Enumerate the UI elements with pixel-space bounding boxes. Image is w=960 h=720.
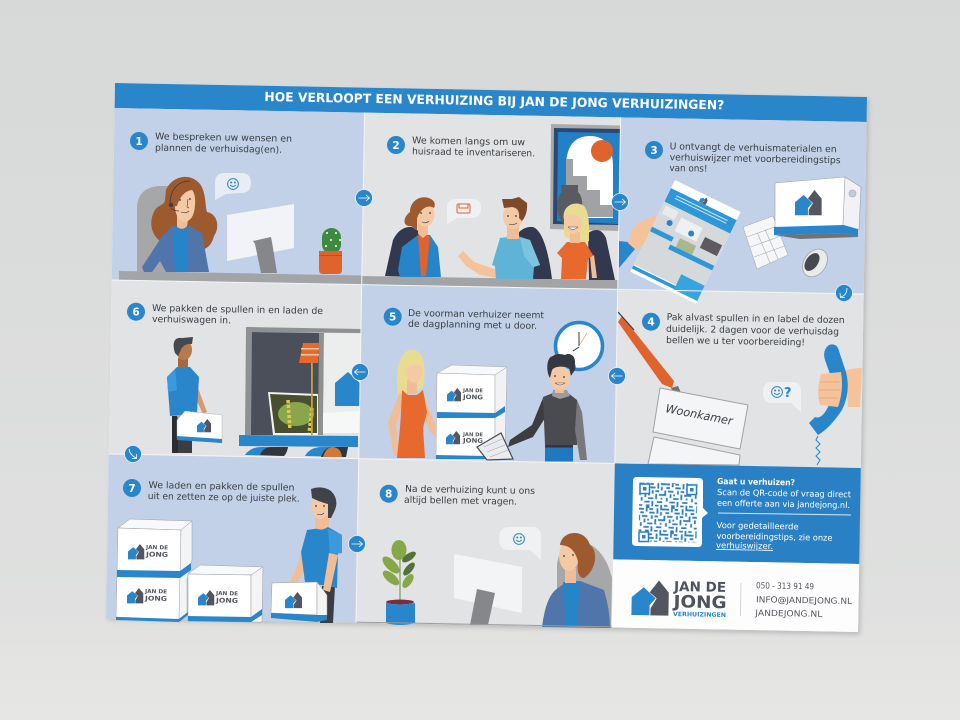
- stacked boxes: [116, 519, 192, 622]
- two stacked boxes with logo: [436, 365, 507, 459]
- monitor: [454, 554, 522, 625]
- text step 4: [666, 312, 845, 348]
- illustration: call-centre woman: [542, 533, 612, 628]
- text step 8: altijd bellen met vragen.: [404, 495, 517, 508]
- call to action text: voorbereidingstips, zie onze: [716, 531, 833, 543]
- clock: [556, 322, 602, 370]
- poster: [106, 83, 867, 632]
- two stacked boxes with logo: JAN DE: [462, 432, 484, 438]
- text step 8: [404, 484, 535, 508]
- contact details: 050 - 313 91 49: [756, 581, 814, 592]
- text step 2: We komen langs om uw: [412, 135, 526, 148]
- arrow 2 to 3: [612, 194, 628, 210]
- contact panel: logo and details: [612, 559, 859, 632]
- step number 2: [387, 136, 405, 154]
- call to action text: verhuiswijzer.: [716, 540, 773, 551]
- two stacked boxes with logo: JONG: [462, 394, 483, 401]
- tape roll: [797, 244, 833, 282]
- text step 4: bellen we u ter voorbereiding!: [666, 335, 805, 348]
- call to action text: een offerte aan via jandejong.nl.: [717, 498, 850, 510]
- step number 6: 6: [132, 307, 140, 319]
- arrow 3 to 4: [836, 284, 852, 302]
- poster shadow: [108, 86, 869, 635]
- text step 3: verhuiswijzer met voorbereidingstips: [670, 152, 841, 166]
- step number 7: [123, 479, 141, 497]
- QR card: [632, 477, 708, 547]
- text step 4: Pak alvast spullen in en label de dozen: [667, 312, 845, 326]
- title: HOE VERLOOPT EEN VERHUIZING BIJ JAN DE JONG VERHUIZINGEN?: [264, 89, 724, 112]
- text step 3: [669, 141, 841, 175]
- header band: [115, 83, 867, 122]
- text step 5: [408, 308, 544, 332]
- illustration: man in teal shirt: [458, 197, 552, 279]
- arrow 4 to 5: [608, 368, 626, 384]
- text step 6: [152, 303, 323, 326]
- text step 7: [148, 480, 300, 505]
- speech bubble: smile: [499, 527, 541, 560]
- arrow 1 to 2: [356, 190, 372, 206]
- panel 4: labelen: [615, 289, 864, 468]
- illustration: mover with box: [271, 487, 342, 623]
- monitor: [227, 204, 294, 273]
- step number 2: 2: [392, 140, 400, 152]
- desk: [119, 271, 362, 284]
- illustration: foreman: [508, 354, 587, 462]
- contact details: JANDEJONG.NL: [754, 609, 823, 620]
- clipboard: [477, 433, 513, 460]
- text step 2: [412, 135, 535, 159]
- panel 6: inladen: [109, 280, 362, 459]
- stacked boxes: JAN DE: [144, 589, 167, 595]
- step number 3: [645, 141, 663, 159]
- leaflet: [630, 180, 741, 304]
- text step 1: [155, 131, 292, 156]
- text step 2: huisraad te inventariseren.: [412, 146, 535, 159]
- step number 4: [642, 313, 660, 331]
- text step 3: U ontvangt de verhuismaterialen en: [670, 141, 837, 155]
- moving box with logo: [774, 177, 861, 239]
- label sheet: [743, 216, 788, 269]
- call to action text: Scan de QR-code of vraag direct: [717, 487, 852, 499]
- text step 3: van ons!: [669, 163, 708, 175]
- text step 8: Na de verhuizing kunt u ons: [405, 484, 535, 497]
- call to action text: [716, 476, 852, 551]
- pen: [618, 312, 686, 404]
- illustration: call-centre woman: [137, 177, 217, 272]
- text step 1: plannen de verhuisdag(en).: [155, 143, 282, 156]
- label Woonkamer: Woonkamer: [664, 401, 735, 428]
- illustration: mover with box: [167, 337, 222, 453]
- step number 1: 1: [135, 136, 143, 148]
- blue house icon: [335, 372, 360, 406]
- step number 3: 3: [650, 145, 658, 157]
- single box: [188, 565, 263, 622]
- panel dividers: [109, 113, 864, 623]
- step number 5: [384, 308, 402, 326]
- single box: JONG: [215, 596, 238, 605]
- contact panel: call to action: [613, 463, 861, 564]
- arrow 5 to 6: [352, 364, 368, 380]
- moving truck: [239, 327, 361, 457]
- bottom edge line: [356, 622, 612, 627]
- illustration: blonde woman: [557, 204, 615, 280]
- illustration: blonde client: [388, 350, 455, 458]
- speech bubble: smile: [215, 173, 251, 200]
- panel 5: dagplanning: [359, 285, 618, 463]
- single box: JAN DE: [215, 591, 238, 597]
- stacked boxes: JONG: [145, 550, 168, 559]
- painting on wall: [550, 124, 620, 231]
- logo: VERHUIZINGEN: [673, 611, 726, 619]
- stacked boxes: JAN DE: [145, 545, 168, 551]
- step number 1: [130, 132, 148, 150]
- two stacked boxes with logo: JAN DE: [462, 388, 484, 394]
- cactus: [319, 228, 342, 274]
- hand and sleeve: [619, 215, 660, 268]
- logo: JONG: [672, 592, 727, 613]
- text step 5: de dagplanning met u door.: [408, 319, 537, 332]
- text step 6: We pakken de spullen in en laden de: [152, 303, 323, 317]
- text step 7: uit en zetten ze op de juiste plek.: [148, 491, 300, 505]
- framed painting: [268, 392, 318, 435]
- illustration: consultant woman: [385, 197, 441, 277]
- floor lamp: [299, 343, 319, 435]
- plant: [380, 540, 418, 625]
- two stacked boxes with logo: JONG: [462, 437, 483, 445]
- phone with hand: [809, 344, 862, 465]
- text step 7: We laden en pakken de spullen: [148, 480, 295, 494]
- panel 3: verhuismaterialen: [618, 117, 867, 304]
- panel 7: uitladen: [106, 454, 359, 623]
- text step 1: We bespreken uw wensen en: [155, 131, 292, 145]
- panel 2: inventariseren: [362, 113, 621, 289]
- step number 4: 4: [647, 317, 655, 329]
- text step 5: De voorman verhuizer neemt: [408, 308, 544, 321]
- contact details: INFO@JANDEJONG.NL: [756, 595, 852, 607]
- panel 8: nazorg: [356, 459, 615, 628]
- call to action text: Voor gedetailleerde: [716, 520, 799, 531]
- text step 4: duidelijk. 2 dagen voor de verhuisdag: [666, 324, 839, 338]
- contact details: [754, 581, 852, 620]
- stacked boxes: JONG: [144, 594, 167, 603]
- second label: [648, 437, 740, 465]
- speech bubble: question: ?: [784, 386, 792, 401]
- call to action text: Gaat u verhuizen?: [717, 476, 795, 487]
- step number 7: 7: [128, 483, 136, 495]
- speech bubble: sofa: [447, 199, 481, 224]
- step number 8: [380, 485, 398, 503]
- step number 6: [127, 303, 145, 321]
- step number 5: 5: [389, 312, 396, 324]
- arrow 6 to 7: [124, 446, 142, 462]
- arrow 7 to 8: [348, 536, 366, 552]
- speech bubble: question: [763, 382, 801, 412]
- desk: [362, 276, 618, 289]
- logo: JAN DE: [673, 579, 726, 596]
- panel 1: bespreken: [112, 108, 365, 285]
- label Woonkamer: [653, 388, 748, 449]
- step number 8: 8: [385, 489, 392, 501]
- logo: [631, 579, 727, 619]
- text step 6: verhuiswagen in.: [152, 314, 231, 326]
